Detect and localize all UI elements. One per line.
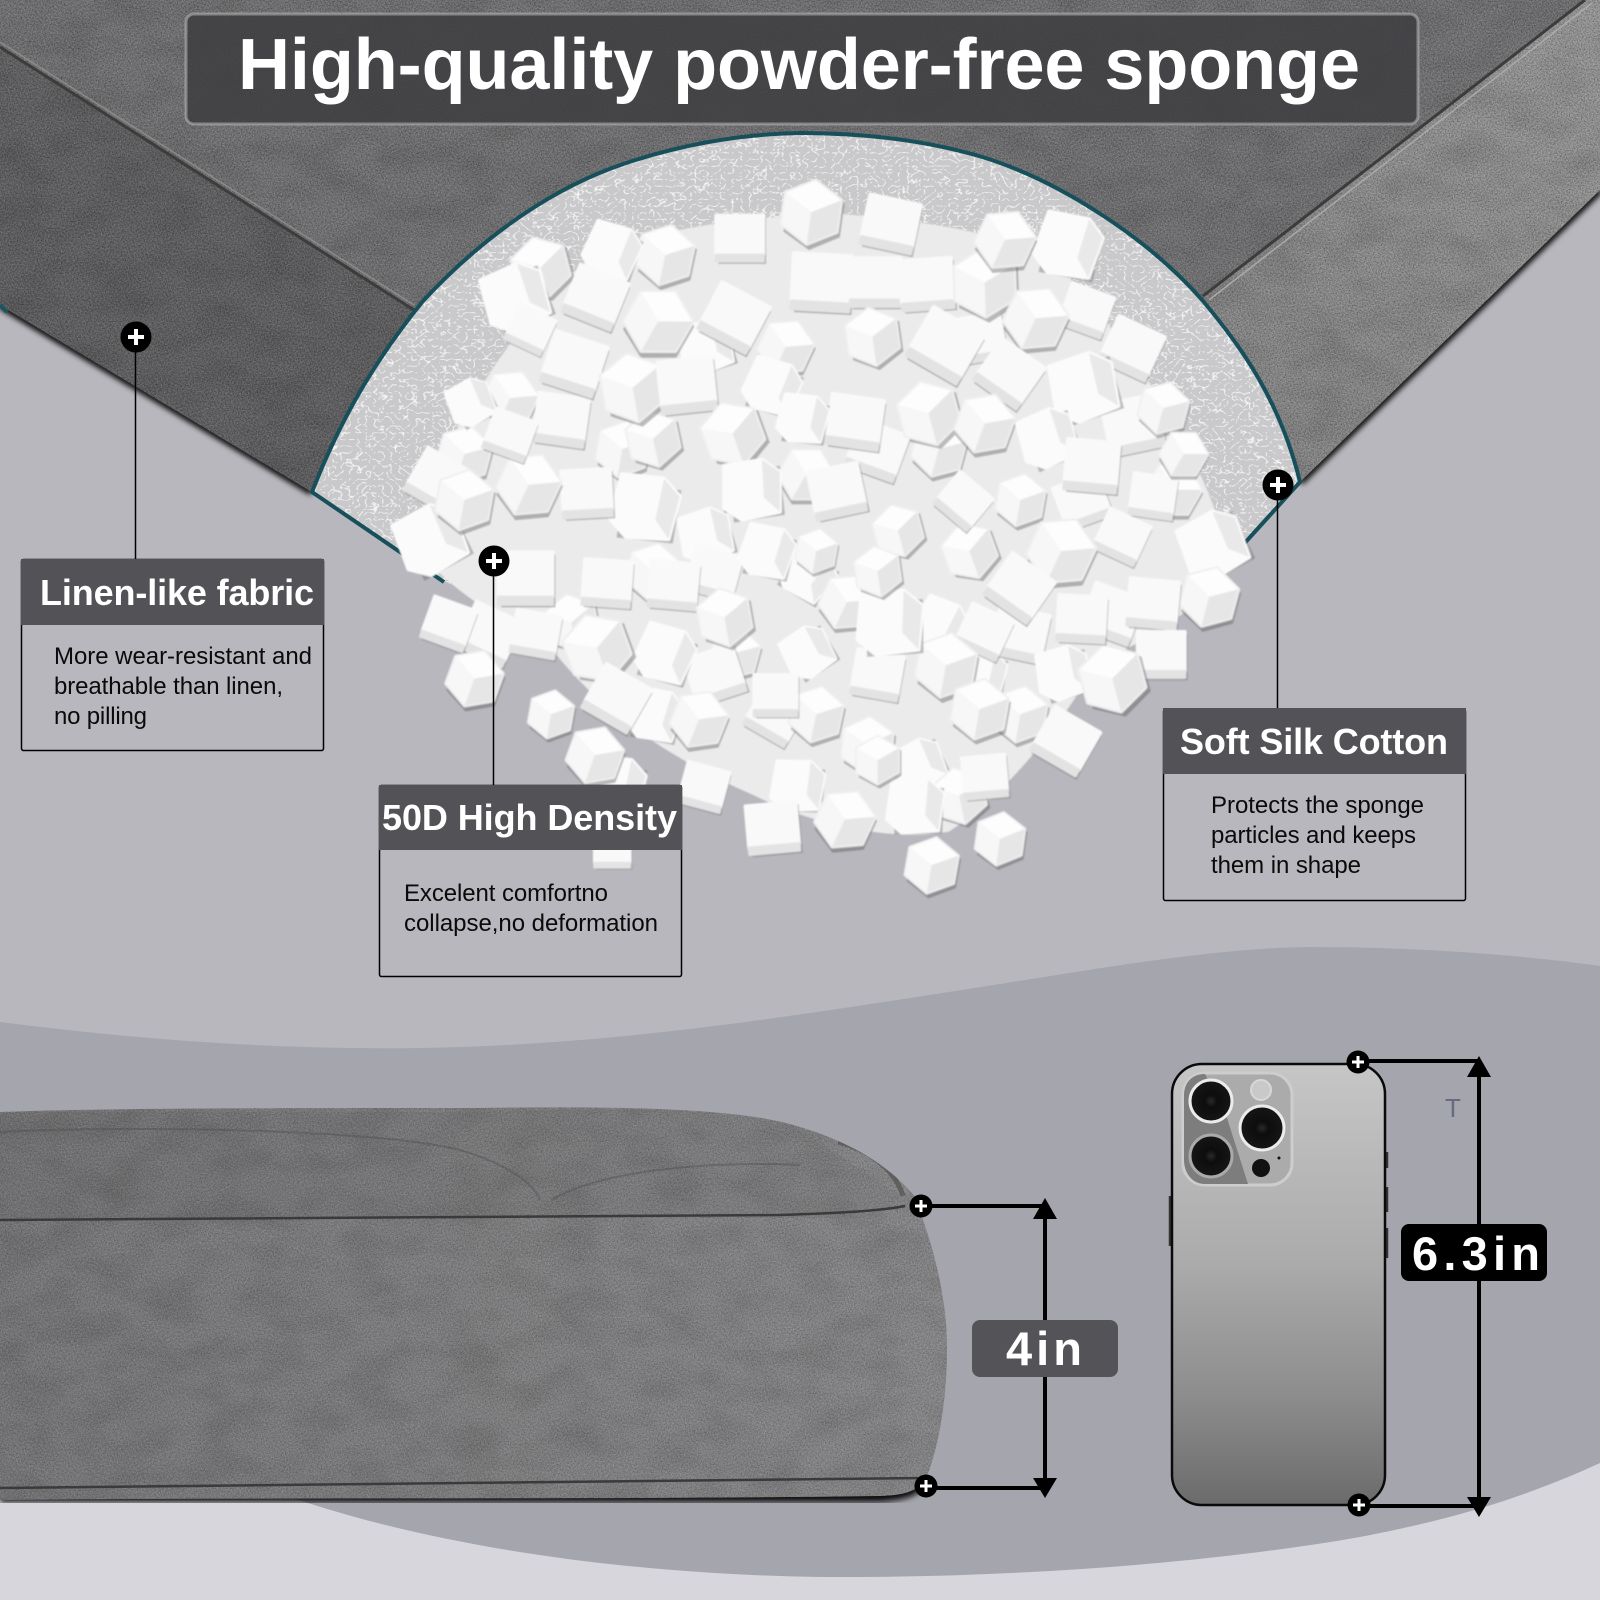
callout: soft silk cotton [1163,470,1466,900]
title banner [186,14,1418,124]
tuft [0,1129,800,1200]
body text [54,643,312,730]
dimension: cushion 4in [910,1194,1118,1498]
body text: breathable than linen, [54,673,283,700]
callout: 50D high density: collapse,no deformation [404,910,658,937]
label 6.3in: 6.3in [1412,1227,1540,1280]
phone [1170,1064,1387,1505]
marker [910,1194,932,1218]
wadding layer [310,131,1302,584]
cushion contact shadow [0,1486,925,1502]
body text: More wear-resistant and [54,643,312,670]
marker [1348,1494,1370,1516]
back small cubes [432,421,498,493]
background bottom curve [0,1463,1600,1600]
leader [120,322,152,559]
background wave band [0,947,1600,1600]
flash [1251,1080,1271,1100]
camera module [1183,1073,1292,1185]
front cubes [778,177,847,254]
top cushion shading [0,1110,900,1218]
callout: 50D high density: 50D High Density [382,797,677,838]
top surface [0,0,1600,520]
right side band [1203,0,1600,482]
callout: soft silk cotton: Protects the sponge [1211,792,1424,819]
cushion outer shadow [0,190,1600,492]
header [21,559,324,625]
box [22,560,324,750]
teal edge [312,133,1300,582]
body text: no pilling [54,703,147,730]
label 4in: 4in [1006,1322,1082,1375]
marker [914,1474,938,1498]
dimension: phone 6.3in [1346,1050,1547,1517]
callout: soft silk cotton: them in shape [1211,852,1361,879]
extension lines and arrow [921,1206,1045,1488]
callout: 50D high density [379,546,682,976]
callout: 50D high density: Excelent comfortno [404,880,608,907]
sponge particles [391,177,1258,903]
title: High-quality powder-free sponge [238,25,1360,105]
callout: linen-like fabric [21,322,324,750]
lidar [1252,1159,1270,1177]
marker [1346,1050,1370,1074]
callout: linen-like fabric: Linen-like fabric [40,572,314,613]
cushion corner from above [0,0,1600,520]
callout: soft silk cotton: Soft Silk Cotton [1180,721,1448,762]
callout: soft silk cotton: particles and keeps [1211,822,1416,849]
stray T: T [1445,1093,1461,1123]
bottom piping [0,1478,925,1488]
phone side buttons [1170,1152,1387,1258]
top piping [0,1206,905,1220]
lenses [1190,1080,1284,1177]
phone body [1172,1064,1385,1505]
corner fold [838,1142,903,1196]
cushion side view [0,1100,960,1510]
left side band [0,47,414,492]
label 4in [972,1320,1118,1377]
